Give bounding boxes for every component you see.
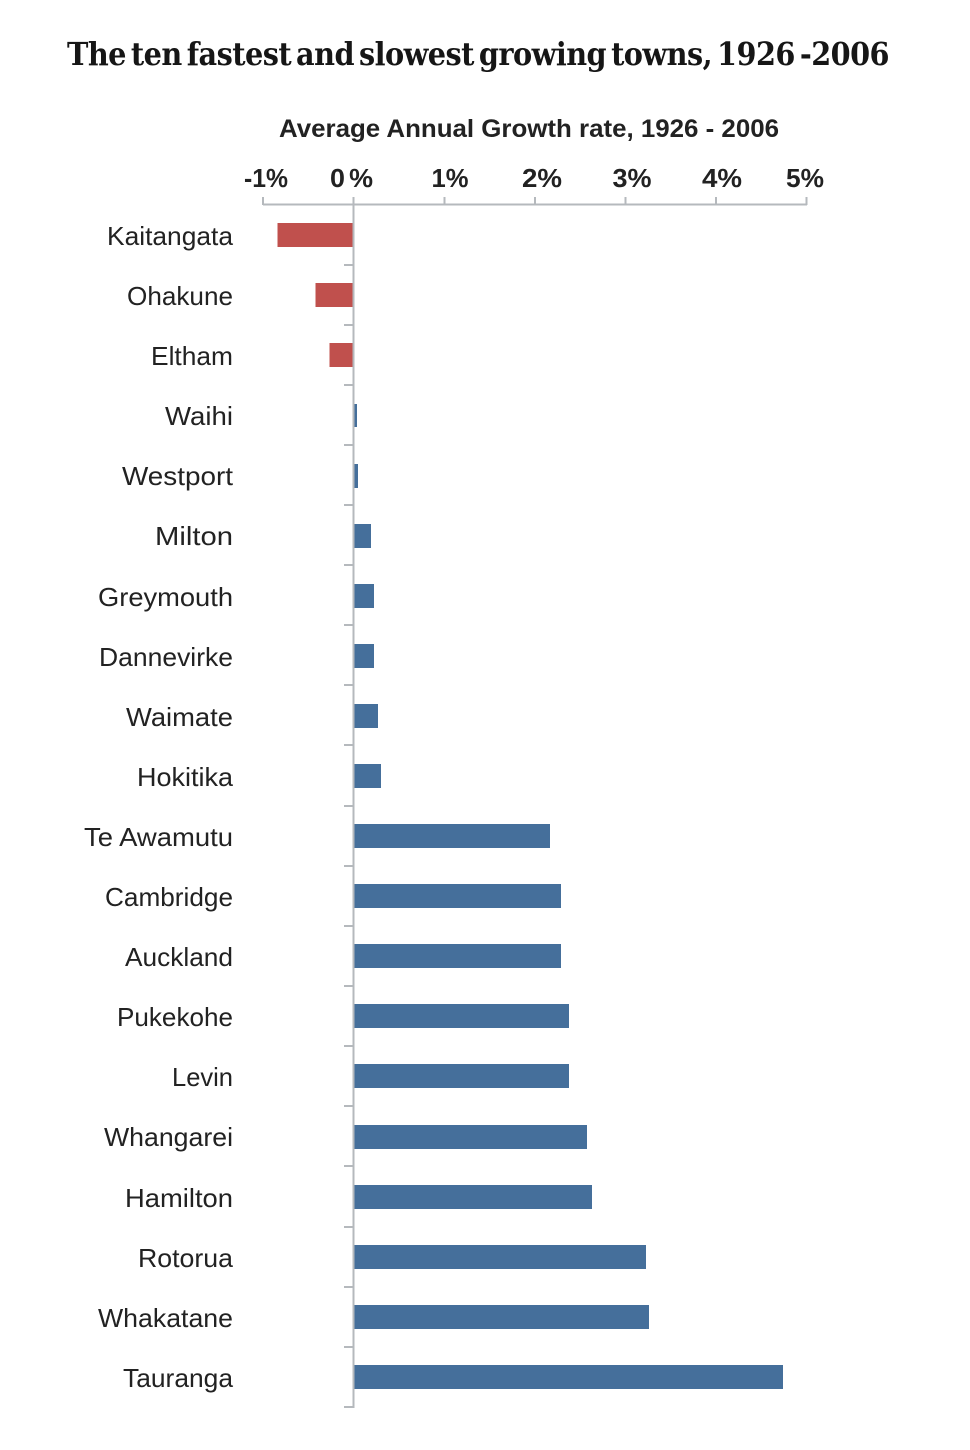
town labels: Ohakune	[127, 281, 233, 311]
x axis: 4%	[702, 163, 742, 193]
town labels: Waimate	[126, 702, 233, 732]
town labels: Te Awamutu	[84, 822, 233, 852]
town labels: Milton	[155, 521, 233, 551]
y axis	[344, 205, 354, 1408]
x axis	[244, 163, 824, 205]
town labels: Whangarei	[104, 1122, 233, 1152]
town labels: Hokitika	[137, 762, 234, 792]
town labels: Kaitangata	[107, 221, 234, 251]
town labels: Westport	[122, 461, 234, 491]
axis title: Average Annual Growth rate, 1926 - 2006	[279, 115, 779, 143]
town labels: Cambridge	[105, 882, 233, 912]
x axis: 1%	[432, 163, 468, 193]
positive growth bars	[354, 404, 783, 1389]
town labels	[84, 221, 234, 1393]
title: The ten fastest and slowest growing towns, 1926 -2006	[67, 35, 889, 73]
town labels: Eltham	[151, 341, 233, 371]
x axis: -1%	[244, 163, 288, 193]
x axis: 3%	[612, 163, 652, 193]
town labels: Greymouth	[98, 582, 233, 612]
negative growth bars	[278, 223, 354, 367]
town labels: Dannevirke	[99, 642, 233, 672]
town labels: Whakatane	[98, 1303, 233, 1333]
town labels: Rotorua	[138, 1243, 234, 1273]
town labels: Pukekohe	[117, 1002, 233, 1032]
town labels: Tauranga	[123, 1363, 234, 1393]
town labels: Levin	[172, 1062, 233, 1092]
x axis: 5%	[786, 163, 824, 193]
town labels: Hamilton	[125, 1183, 233, 1213]
x axis: 2%	[522, 163, 562, 193]
town labels: Auckland	[125, 942, 233, 972]
town labels: Waihi	[165, 401, 233, 431]
x axis: 0%	[330, 163, 373, 193]
